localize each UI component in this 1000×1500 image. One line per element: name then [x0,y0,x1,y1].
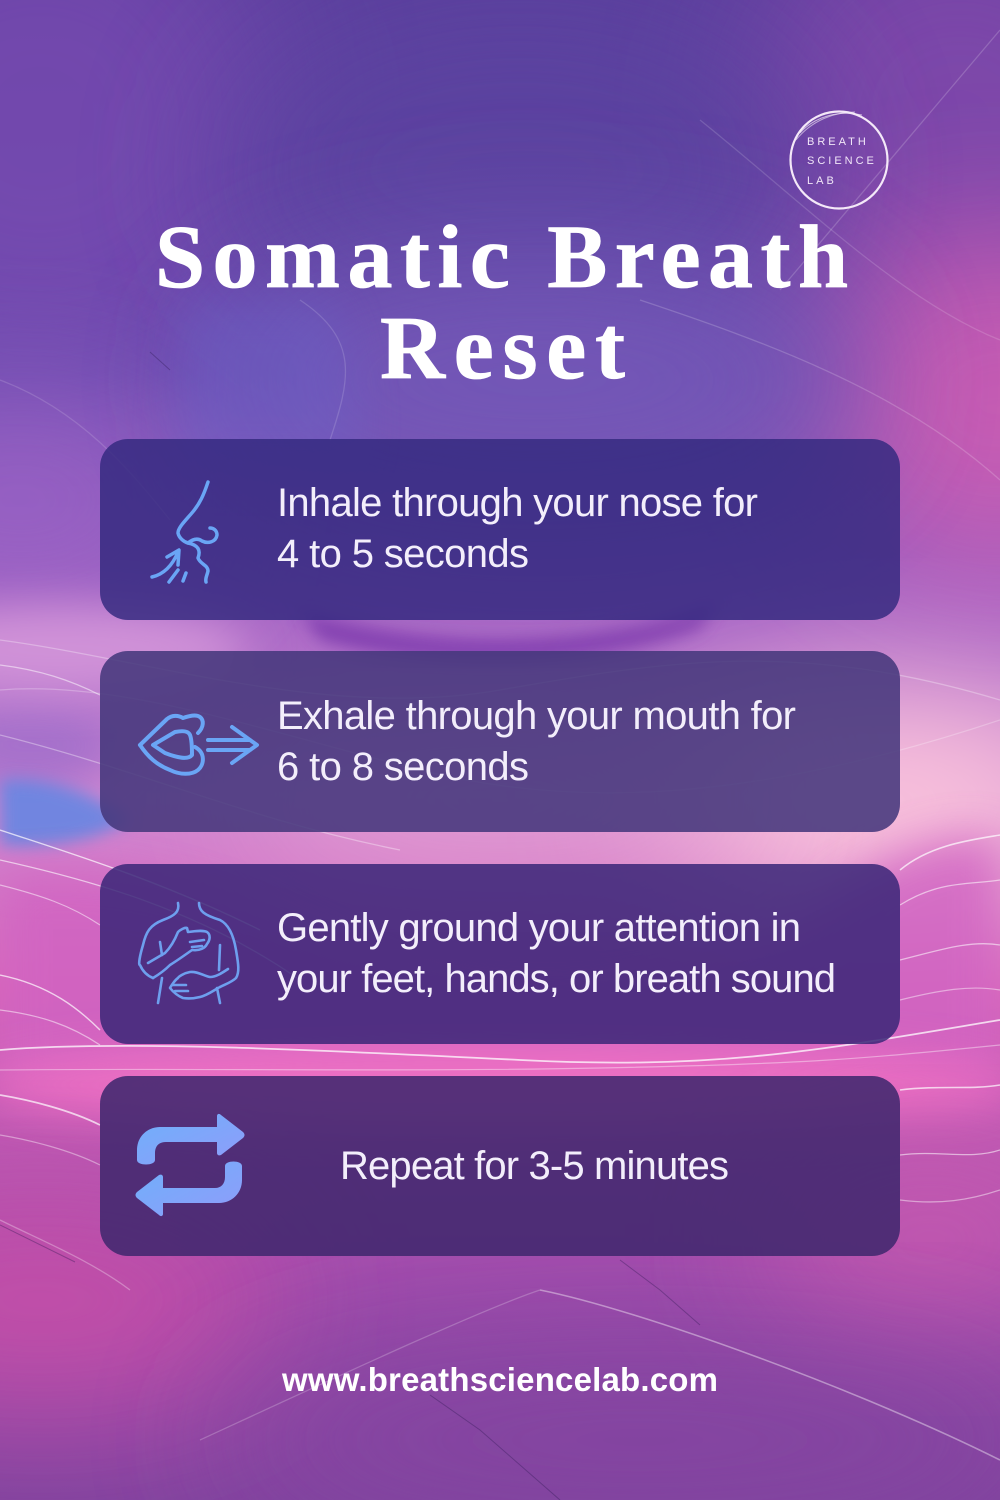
panel: repeat: Repeat for 3-5 minutes [340,1144,729,1188]
logo: Breath Science Lab: LAB [807,175,837,187]
panel: inhale: 4 to 5 seconds [277,532,529,576]
panel: exhale [100,651,900,832]
panel: exhale: Exhale through your mouth for [277,694,796,738]
title: Reset [380,299,625,398]
panel: inhale: Inhale through your nose for [277,481,758,525]
logo: Breath Science Lab: BREATH [807,136,869,148]
panel: repeat [100,1076,900,1256]
title [155,208,848,398]
panel: exhale: 6 to 8 seconds [277,745,529,789]
panel: ground attention: Gently ground your attention in [277,906,801,950]
panel: ground attention [100,864,900,1044]
website url: www.breathsciencelab.com [281,1361,718,1398]
panel: ground attention: your feet, hands, or breath sound [277,957,836,1001]
icon: lips with exhale arrows [140,715,257,774]
icon: repeat arrows [136,1114,244,1216]
icon: nose with inhaled air [152,482,217,582]
title: Somatic Breath [155,208,848,307]
icon: hands on chest and belly [139,903,238,1003]
logo: Breath Science Lab [790,112,888,208]
logo: Breath Science Lab: SCIENCE [807,155,877,167]
panel: inhale [100,439,900,620]
